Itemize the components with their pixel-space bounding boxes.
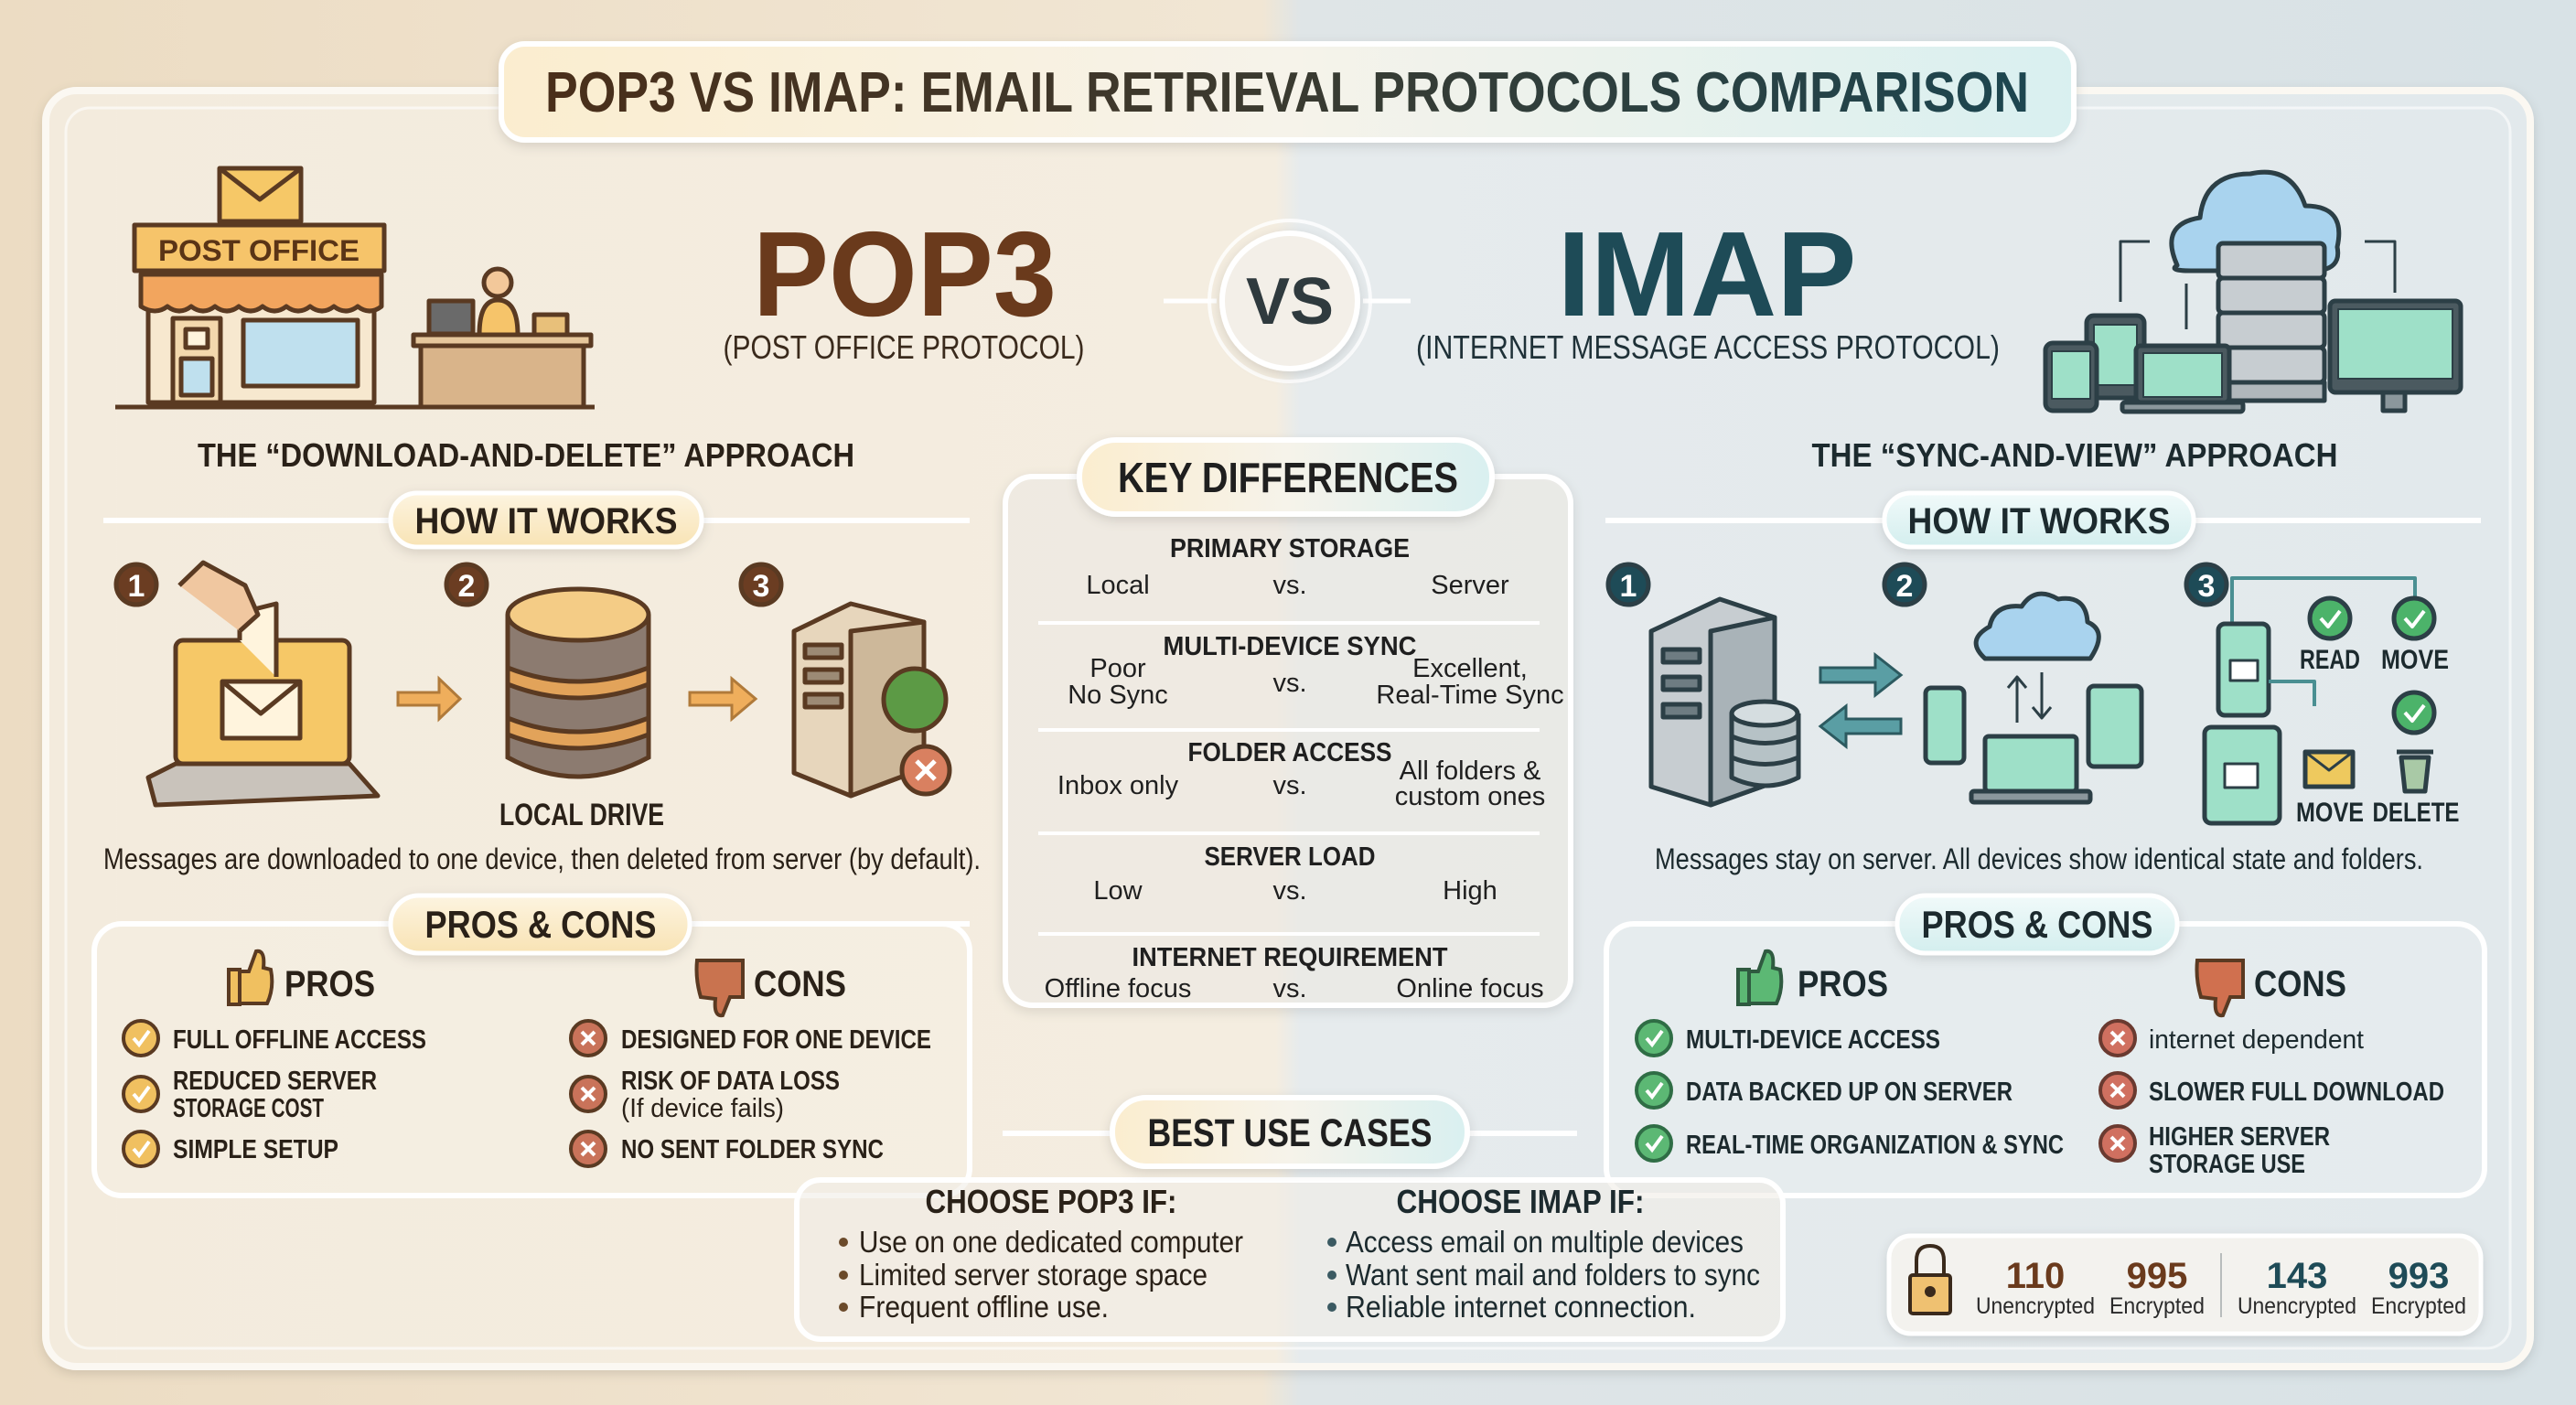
title — [501, 44, 2074, 140]
panel: best use cases: CHOOSE POP3 IF: — [926, 1183, 1176, 1220]
panel: key differences: vs. — [1272, 974, 1307, 1003]
POP3 heading: (POST OFFICE PROTOCOL) — [723, 328, 1085, 366]
panel: key differences: Offline focus — [1045, 974, 1191, 1003]
panel: key differences: High — [1443, 876, 1497, 906]
arrows sync — [1820, 655, 1901, 746]
step 2 database — [446, 564, 664, 832]
panel: key differences: Poor — [1089, 654, 1146, 683]
panel: port numbers — [1889, 1236, 2481, 1334]
panel: key differences: MULTI-DEVICE SYNC — [1164, 632, 1417, 661]
how it works steps IMAP: MOVE — [2381, 645, 2449, 675]
panel: pros & cons IMAP: PROS & CONS — [1921, 903, 2153, 946]
approach label IMAP: THE “SYNC-AND-VIEW” APPROACH — [1811, 436, 2338, 474]
panel: best use cases: Limited server storage space — [859, 1258, 1208, 1292]
panel: key differences: SERVER LOAD — [1204, 842, 1376, 872]
panel: key differences: Server — [1431, 571, 1509, 600]
how it works heading right — [1605, 493, 2481, 547]
illustration: post office — [115, 168, 595, 407]
step 3 server with delete — [741, 564, 950, 796]
panel: pros & cons POP3: FULL OFFLINE ACCESS — [173, 1025, 426, 1055]
IMAP heading: (INTERNET MESSAGE ACCESS PROTOCOL) — [1416, 328, 2000, 366]
panel: key differences: vs. — [1272, 771, 1307, 800]
icon: thumbs down — [697, 960, 743, 1015]
illustration: IMAP cloud + devices — [2045, 172, 2461, 412]
panel: port numbers: Unencrypted — [2238, 1293, 2356, 1319]
panel: key differences: Low — [1093, 876, 1143, 906]
POP3 heading: POP3 — [753, 207, 1057, 341]
VS badge: VS — [1246, 265, 1334, 338]
panel: pros & cons IMAP: MULTI-DEVICE ACCESS — [1686, 1025, 1940, 1055]
panel: best use cases: CHOOSE IMAP IF: — [1396, 1183, 1645, 1220]
IMAP heading: IMAP — [1557, 207, 1857, 341]
step 1 laptop — [116, 563, 378, 805]
panel: pros & cons IMAP: STORAGE USE — [2149, 1150, 2305, 1179]
panel: key differences — [1005, 440, 1571, 1005]
step 2 database: LOCAL DRIVE — [499, 798, 664, 832]
panel: pros & cons POP3: PROS & CONS — [424, 903, 657, 946]
caption POP3: Messages are downloaded to one device, then deleted from server (by default). — [103, 842, 981, 875]
panel: port numbers: 995 — [2127, 1256, 2187, 1296]
panel: pros & cons POP3: (If device fails) — [621, 1094, 784, 1123]
IMAP heading — [1416, 207, 2000, 366]
panel: port numbers: Encrypted — [2109, 1293, 2205, 1319]
step 1 server: 1 — [1620, 569, 1637, 604]
panel: pros & cons POP3 — [94, 896, 970, 1196]
step 1 laptop: 1 — [128, 569, 145, 604]
how it works heading left — [103, 493, 970, 547]
panel: key differences: INTERNET REQUIREMENT — [1132, 943, 1448, 972]
step 2 cloud devices: 2 — [1896, 569, 1913, 604]
panel: key differences: PRIMARY STORAGE — [1170, 534, 1410, 563]
panel: key differences: Excellent, — [1412, 654, 1528, 683]
panel: pros & cons POP3: CONS — [754, 964, 846, 1004]
how it works steps IMAP: READ — [2300, 645, 2360, 675]
panel: best use cases: Want sent mail and folders to sync — [1346, 1258, 1760, 1292]
illustration: post office: POST OFFICE — [158, 234, 360, 267]
panel: pros & cons POP3: RISK OF DATA LOSS — [621, 1067, 840, 1096]
arrow 1 — [398, 679, 460, 719]
panel: port numbers: 993 — [2388, 1256, 2449, 1296]
how it works heading left: HOW IT WORKS — [415, 501, 677, 542]
panel: best use cases: Access email on multiple devices — [1346, 1225, 1744, 1259]
panel: key differences: Online focus — [1396, 974, 1544, 1003]
panel: pros & cons POP3: SIMPLE SETUP — [173, 1135, 338, 1164]
step 2 cloud devices — [1884, 564, 2141, 802]
panel: pros & cons IMAP: REAL-TIME ORGANIZATION & SYNC — [1686, 1131, 2064, 1160]
icon: padlock — [1910, 1246, 1950, 1314]
panel: pros & cons IMAP: internet dependent — [2149, 1025, 2364, 1055]
icon: thumbs up green — [1738, 951, 1781, 1004]
panel: pros & cons POP3: NO SENT FOLDER SYNC — [621, 1135, 884, 1164]
panel: pros & cons IMAP: SLOWER FULL DOWNLOAD — [2149, 1078, 2444, 1107]
panel: pros & cons IMAP: PROS — [1798, 964, 1888, 1004]
panel: port numbers: 143 — [2267, 1256, 2327, 1296]
approach label POP3: THE “DOWNLOAD-AND-DELETE” APPROACH — [198, 436, 854, 474]
icon: thumbs up — [229, 951, 272, 1004]
title: POP3 VS IMAP: EMAIL RETRIEVAL PROTOCOLS COMPARISON — [545, 61, 2029, 124]
panel: key differences: vs. — [1272, 876, 1307, 906]
panel: key differences: custom ones — [1395, 782, 1545, 811]
panel: key differences: No Sync — [1068, 681, 1168, 710]
step 3 actions — [2186, 564, 2434, 823]
panel: key differences: Inbox only — [1057, 771, 1179, 800]
panel: key differences: KEY DIFFERENCES — [1118, 454, 1458, 501]
panel: best use cases: Use on one dedicated computer — [859, 1225, 1243, 1259]
step 1 server — [1608, 564, 1798, 805]
arrow 2 — [690, 679, 756, 719]
step 3 actions: 3 — [2198, 569, 2215, 604]
panel: best use cases: BEST USE CASES — [1147, 1111, 1433, 1155]
panel: key differences: All folders & — [1400, 756, 1540, 786]
how it works steps IMAP: MOVE — [2296, 798, 2364, 828]
caption IMAP: Messages stay on server. All devices show identical state and folders. — [1655, 842, 2423, 875]
icon: thumbs down red — [2197, 960, 2243, 1015]
panel: key differences: vs. — [1272, 669, 1307, 698]
panel: key differences: Real-Time Sync — [1376, 681, 1564, 710]
step 3 server with delete: 3 — [753, 569, 769, 604]
panel: best use cases: Frequent offline use. — [859, 1290, 1109, 1324]
panel: pros & cons POP3: DESIGNED FOR ONE DEVICE — [621, 1025, 931, 1055]
panel: pros & cons IMAP: CONS — [2254, 964, 2346, 1004]
how it works steps POP3 — [116, 563, 950, 832]
panel: port numbers: Encrypted — [2371, 1293, 2466, 1319]
panel: pros & cons IMAP: HIGHER SERVER — [2149, 1122, 2330, 1152]
how it works steps IMAP — [1608, 564, 2459, 828]
panel: pros & cons POP3: PROS — [284, 964, 375, 1004]
step 2 database: 2 — [458, 569, 475, 604]
how it works steps IMAP: DELETE — [2373, 798, 2459, 828]
panel: port numbers: 110 — [2006, 1256, 2065, 1296]
how it works heading right: HOW IT WORKS — [1908, 501, 2170, 542]
panel: pros & cons POP3: STORAGE COST — [173, 1094, 324, 1123]
panel: pros & cons POP3: REDUCED SERVER — [173, 1067, 377, 1096]
panel: best use cases: Reliable internet connection. — [1346, 1290, 1696, 1324]
panel: pros & cons IMAP — [1606, 896, 2485, 1196]
panel: key differences: vs. — [1272, 571, 1307, 600]
panel: pros & cons IMAP: DATA BACKED UP ON SERVER — [1686, 1078, 2012, 1107]
panel: best use cases — [797, 1098, 1783, 1339]
panel: key differences: Local — [1086, 571, 1150, 600]
panel: key differences: FOLDER ACCESS — [1187, 738, 1392, 767]
VS badge — [1164, 220, 1411, 381]
panel: port numbers: Unencrypted — [1976, 1293, 2095, 1319]
